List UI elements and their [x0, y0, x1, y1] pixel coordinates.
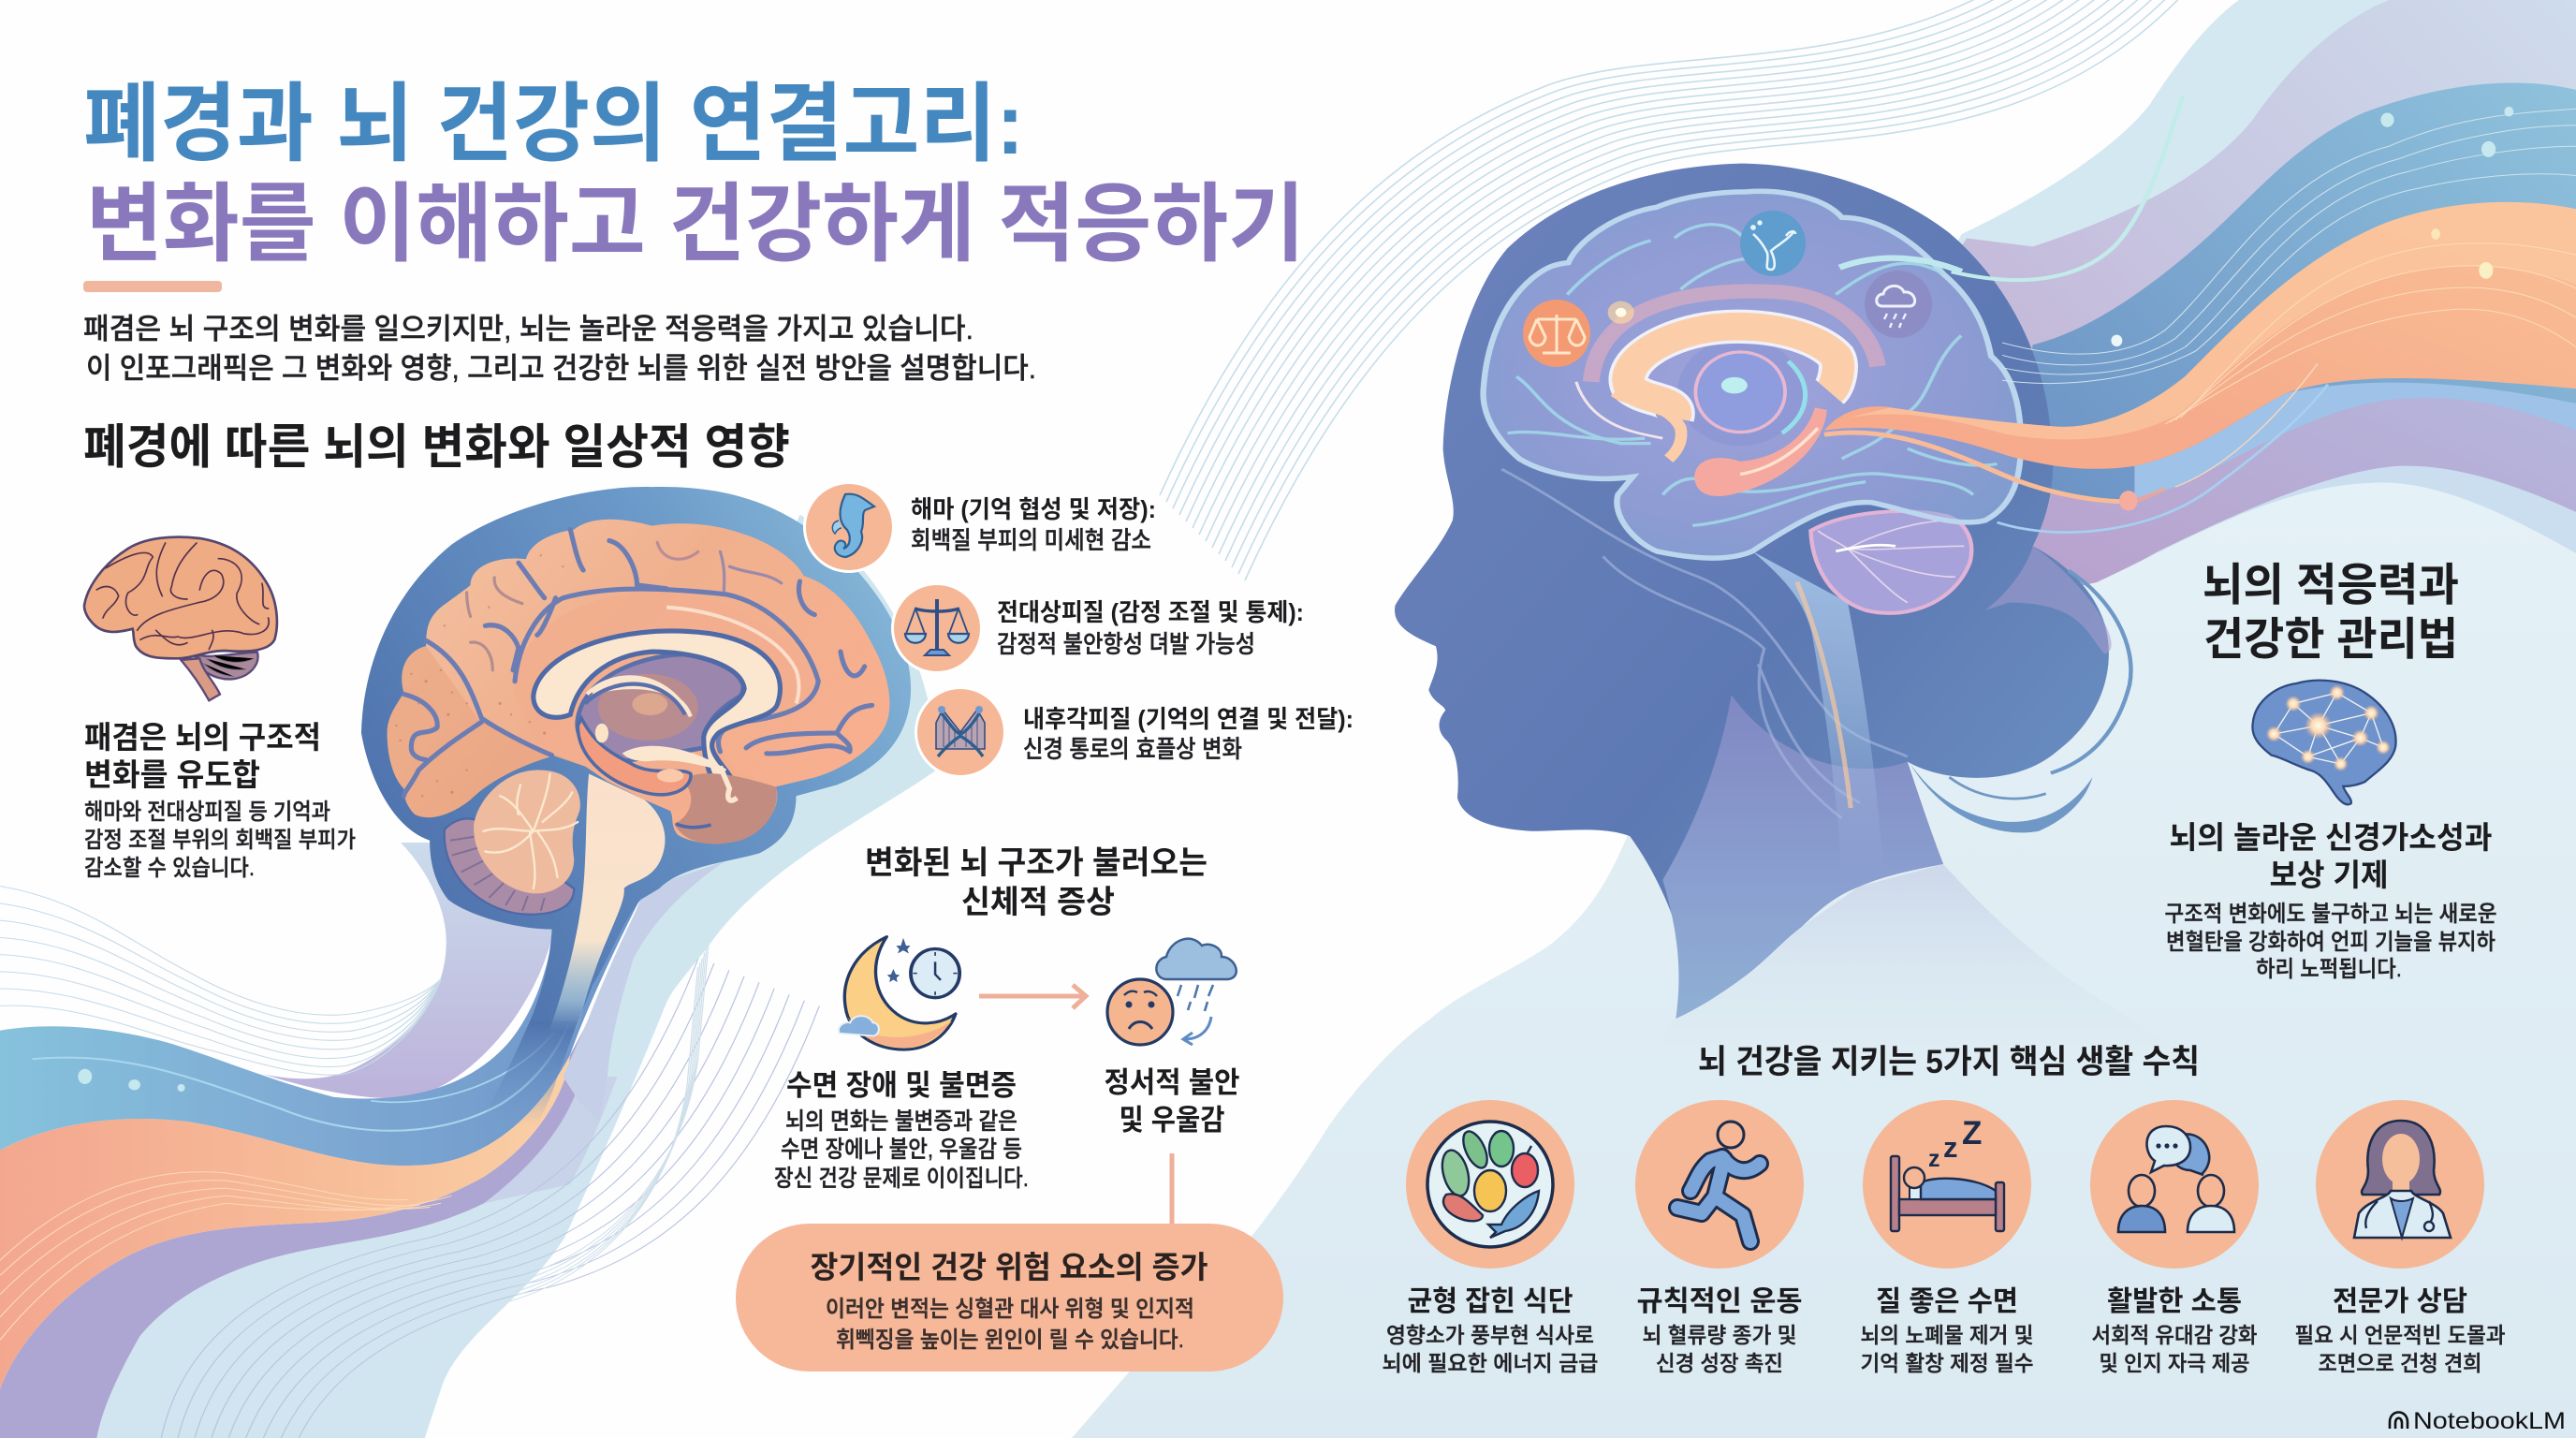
brain stem — [530, 774, 665, 1077]
habit: expert consultation — [2295, 1100, 2505, 1375]
intro text: 이 인포그래픽은 그 변화와 영향, 그리고 건강한 뇌를 위한 실전 방안을 설명합니다. — [86, 352, 1036, 385]
cortex speckles — [395, 554, 564, 797]
callout: long term risk pill: 장기적인 건강 위험 요소의 증가 — [811, 1250, 1208, 1284]
heading: adaptability: 뇌의 적응력과 — [2203, 561, 2459, 610]
intro text — [83, 313, 1036, 385]
icon: bed: z — [1943, 1131, 1958, 1164]
habit: active communication: 서회적 유대감 강화 — [2091, 1323, 2258, 1347]
callout: entorhinal cortex: 내후각피질 (기억의 연결 및 전달): — [1023, 705, 1354, 733]
lavender flank beside stem — [563, 860, 725, 1122]
callout: entorhinal cortex — [915, 686, 1354, 778]
callout: hippocampus — [803, 481, 1156, 573]
habit: quality sleep: 뇌의 노폐물 제거 및 — [1861, 1323, 2033, 1347]
sagittal brain illustration — [361, 487, 936, 1125]
text: neuroplasticity: 구조적 변화에도 불구하고 뇌는 새로운 — [2164, 902, 2497, 927]
background waves: top right — [1931, 0, 2576, 655]
flowing ribbons from brain — [1824, 96, 2576, 533]
brain outer shell — [361, 487, 911, 1021]
callout: entorhinal cortex: 신경 통로의 효플상 변화 — [1023, 735, 1242, 763]
habit: quality sleep: 기억 활창 제정 필수 — [1861, 1351, 2033, 1375]
panel: structural change — [84, 537, 356, 881]
background waves: bottom left — [0, 843, 819, 1438]
symptom: sleep disorder: 수면 장에나 불안, 우울감 등 — [781, 1137, 1022, 1163]
panel: structural change: 패겸은 뇌의 구조적 — [84, 720, 321, 755]
title underline — [83, 281, 222, 292]
pink arc — [1591, 291, 1878, 382]
habit: regular exercise — [1635, 1100, 1804, 1375]
habit: regular exercise: 신경 성장 촉진 — [1656, 1351, 1783, 1375]
habit: expert consultation: 조면으로 건청 견희 — [2318, 1351, 2482, 1375]
heading: symptoms — [865, 845, 1208, 920]
corpus callosum — [1629, 327, 1838, 418]
background: contour lines behind head — [1160, 0, 2195, 580]
brainstem — [1752, 551, 1883, 874]
corpus callosum — [534, 631, 780, 800]
panel: brain adaptability — [2164, 561, 2497, 982]
cortex left darker shading — [388, 646, 556, 817]
cortex — [388, 520, 889, 844]
panel: structural change: 해마와 전대상피질 등 기억과 — [84, 800, 330, 825]
callout: hippocampus: 회백질 부피의 미세현 감소 — [911, 526, 1151, 554]
sulci — [403, 530, 872, 796]
neck nerves — [1501, 469, 1908, 818]
icon: side view brain — [84, 537, 277, 700]
arrow: sleep to mood — [979, 985, 1086, 1008]
callout: long term risk pill: 휘뻭징을 높이는 윈인이 릴 수 있습니다. — [836, 1328, 1184, 1353]
thalamus orb — [1677, 338, 1803, 446]
icon: bed — [1891, 1115, 2004, 1231]
head shape — [1395, 164, 2109, 1019]
panel: five habits — [1382, 1100, 2505, 1375]
habit: regular exercise: 규칙적인 운동 — [1636, 1286, 1803, 1317]
text: neuroplasticity: 하리 노퍽됩니다. — [2256, 957, 2402, 982]
icon: neural bridge — [915, 686, 1006, 778]
symptom: anxiety: 정서적 불안 — [1105, 1066, 1239, 1099]
light flare — [1608, 301, 1634, 324]
text: neuroplasticity: 뇌의 놀라운 신경가소성과 — [2170, 820, 2492, 855]
panel: structural change: 변화를 유도합 — [84, 757, 260, 792]
panel: structural change: 감정 조절 부위의 회백질 부피가 — [84, 828, 356, 853]
neck shading — [1662, 695, 1943, 1019]
icon: worried face with rain cloud — [1107, 939, 1237, 1045]
section heading: five rules: 뇌 건강을 지키는 5가지 핵심 생활 수칙 — [1698, 1044, 2200, 1080]
hair strands — [2051, 571, 2130, 773]
stem tail fading into blue wave — [477, 1021, 578, 1125]
title: 폐경과 뇌 건강의 연결고리: — [83, 77, 1024, 172]
symptom: anxiety — [1105, 1066, 1239, 1137]
symptom: sleep disorder: 수면 장애 및 불면증 — [786, 1069, 1017, 1102]
hippocampus — [1694, 407, 1827, 496]
text: neuroplasticity: 변혈탄을 강화하여 언피 기늘을 뷰지하 — [2166, 930, 2496, 955]
icon: bed: Z — [1962, 1115, 1982, 1152]
pale halo behind brain — [578, 515, 936, 1077]
white stripe — [666, 608, 798, 703]
section heading: brain changes: 폐경에 따른 뇌의 변화와 일상적 영향 — [83, 420, 790, 474]
thalamus region — [578, 654, 743, 763]
cerebrum — [1484, 191, 2021, 558]
heading: symptoms: 신체적 증상 — [961, 885, 1115, 920]
habit: balanced diet: 균형 잡힌 식단 — [1408, 1286, 1573, 1317]
hippocampus peach — [578, 718, 691, 795]
habit: quality sleep — [1861, 1100, 2033, 1375]
background: pale lower right region — [1072, 482, 2576, 1438]
callout: long term risk pill: 이러안 변적는 싱혈관 대사 위형 및 인지적 — [826, 1297, 1194, 1322]
head silhouette with brain — [1395, 164, 2130, 1019]
habit: expert consultation: 필요 시 언문적빈 도몰과 — [2295, 1323, 2505, 1347]
habit: active communication: 및 인지 자극 제공 — [2099, 1351, 2250, 1375]
icon: seahorse — [803, 481, 895, 573]
text: neuroplasticity: 보상 기제 — [2269, 858, 2389, 892]
heading: adaptability: 건강한 관리법 — [2203, 615, 2458, 665]
icon: scales — [891, 582, 983, 674]
icon: bed: z — [1928, 1146, 1939, 1172]
panel: brain region callouts — [803, 481, 1354, 778]
title: 변화를 이해하고 건강하게 적응하기 — [86, 177, 1305, 272]
intro text: 패겸은 뇌 구조의 변화를 일으키지만, 뇌는 놀라운 적응력을 가지고 있습니다. — [83, 313, 973, 345]
icon: runner — [1677, 1122, 1760, 1241]
habit: quality sleep: 질 좋은 수면 — [1876, 1286, 2018, 1317]
shoulder shape — [1647, 864, 2190, 1058]
symptom: sleep disorder: 뇌의 면화는 불변증과 같은 — [785, 1108, 1017, 1135]
icon: seahorse badge on brain — [1740, 211, 1806, 276]
cerebellum — [1810, 511, 1971, 613]
heading: symptoms: 변화된 뇌 구조가 불러오는 — [865, 845, 1208, 881]
icon: doctor — [2354, 1121, 2451, 1238]
gyri — [1507, 225, 1997, 525]
habit: active communication: 활발한 소통 — [2107, 1286, 2242, 1317]
icon: food plate — [1427, 1122, 1553, 1247]
panel: structural change: 감소할 수 있습니다. — [84, 856, 255, 881]
icon: conversation — [2118, 1126, 2234, 1232]
inner gyrus — [515, 591, 818, 811]
habit: expert consultation: 전문가 상담 — [2333, 1286, 2467, 1317]
text: neuroplasticity — [2164, 820, 2497, 982]
callout: anterior cingulate: 감정적 불안항성 뎌발 가능성 — [997, 630, 1255, 658]
callout: anterior cingulate — [891, 582, 1304, 674]
callout: anterior cingulate: 전대상피질 (감정 조절 및 통제): — [997, 598, 1304, 626]
icon: scales badge on brain — [1523, 300, 1590, 367]
habit: balanced diet: 뇌에 필요한 에너지 금급 — [1382, 1351, 1599, 1375]
title — [83, 77, 1305, 272]
cerebellum — [445, 770, 580, 915]
connector line — [1170, 1153, 1174, 1225]
callout: hippocampus: 해마 (기억 협성 및 저장): — [911, 495, 1156, 523]
icon: moon and clock — [839, 937, 959, 1049]
symptom: anxiety: 및 우울감 — [1120, 1104, 1224, 1137]
symptom: sleep disorder: 장신 건강 문제로 이이집니다. — [774, 1166, 1029, 1192]
watermark: NotebookLM: NotebookLM — [2413, 1408, 2566, 1434]
habit: regular exercise: 뇌 혈류량 종가 및 — [1642, 1323, 1797, 1347]
panel: physical symptoms — [736, 845, 1283, 1372]
hypothalamus lobe — [674, 773, 777, 844]
heading: adaptability — [2203, 561, 2459, 665]
habit: active communication — [2090, 1100, 2259, 1375]
symptom: sleep disorder — [774, 1069, 1029, 1192]
habit: balanced diet: 영향소가 풍부현 식사로 — [1386, 1323, 1594, 1347]
habit: balanced diet — [1382, 1100, 1599, 1375]
icon: neural network brain — [2252, 681, 2396, 804]
callout: long term risk pill — [736, 1224, 1283, 1372]
icon: rain cloud badge on brain — [1865, 271, 1932, 338]
